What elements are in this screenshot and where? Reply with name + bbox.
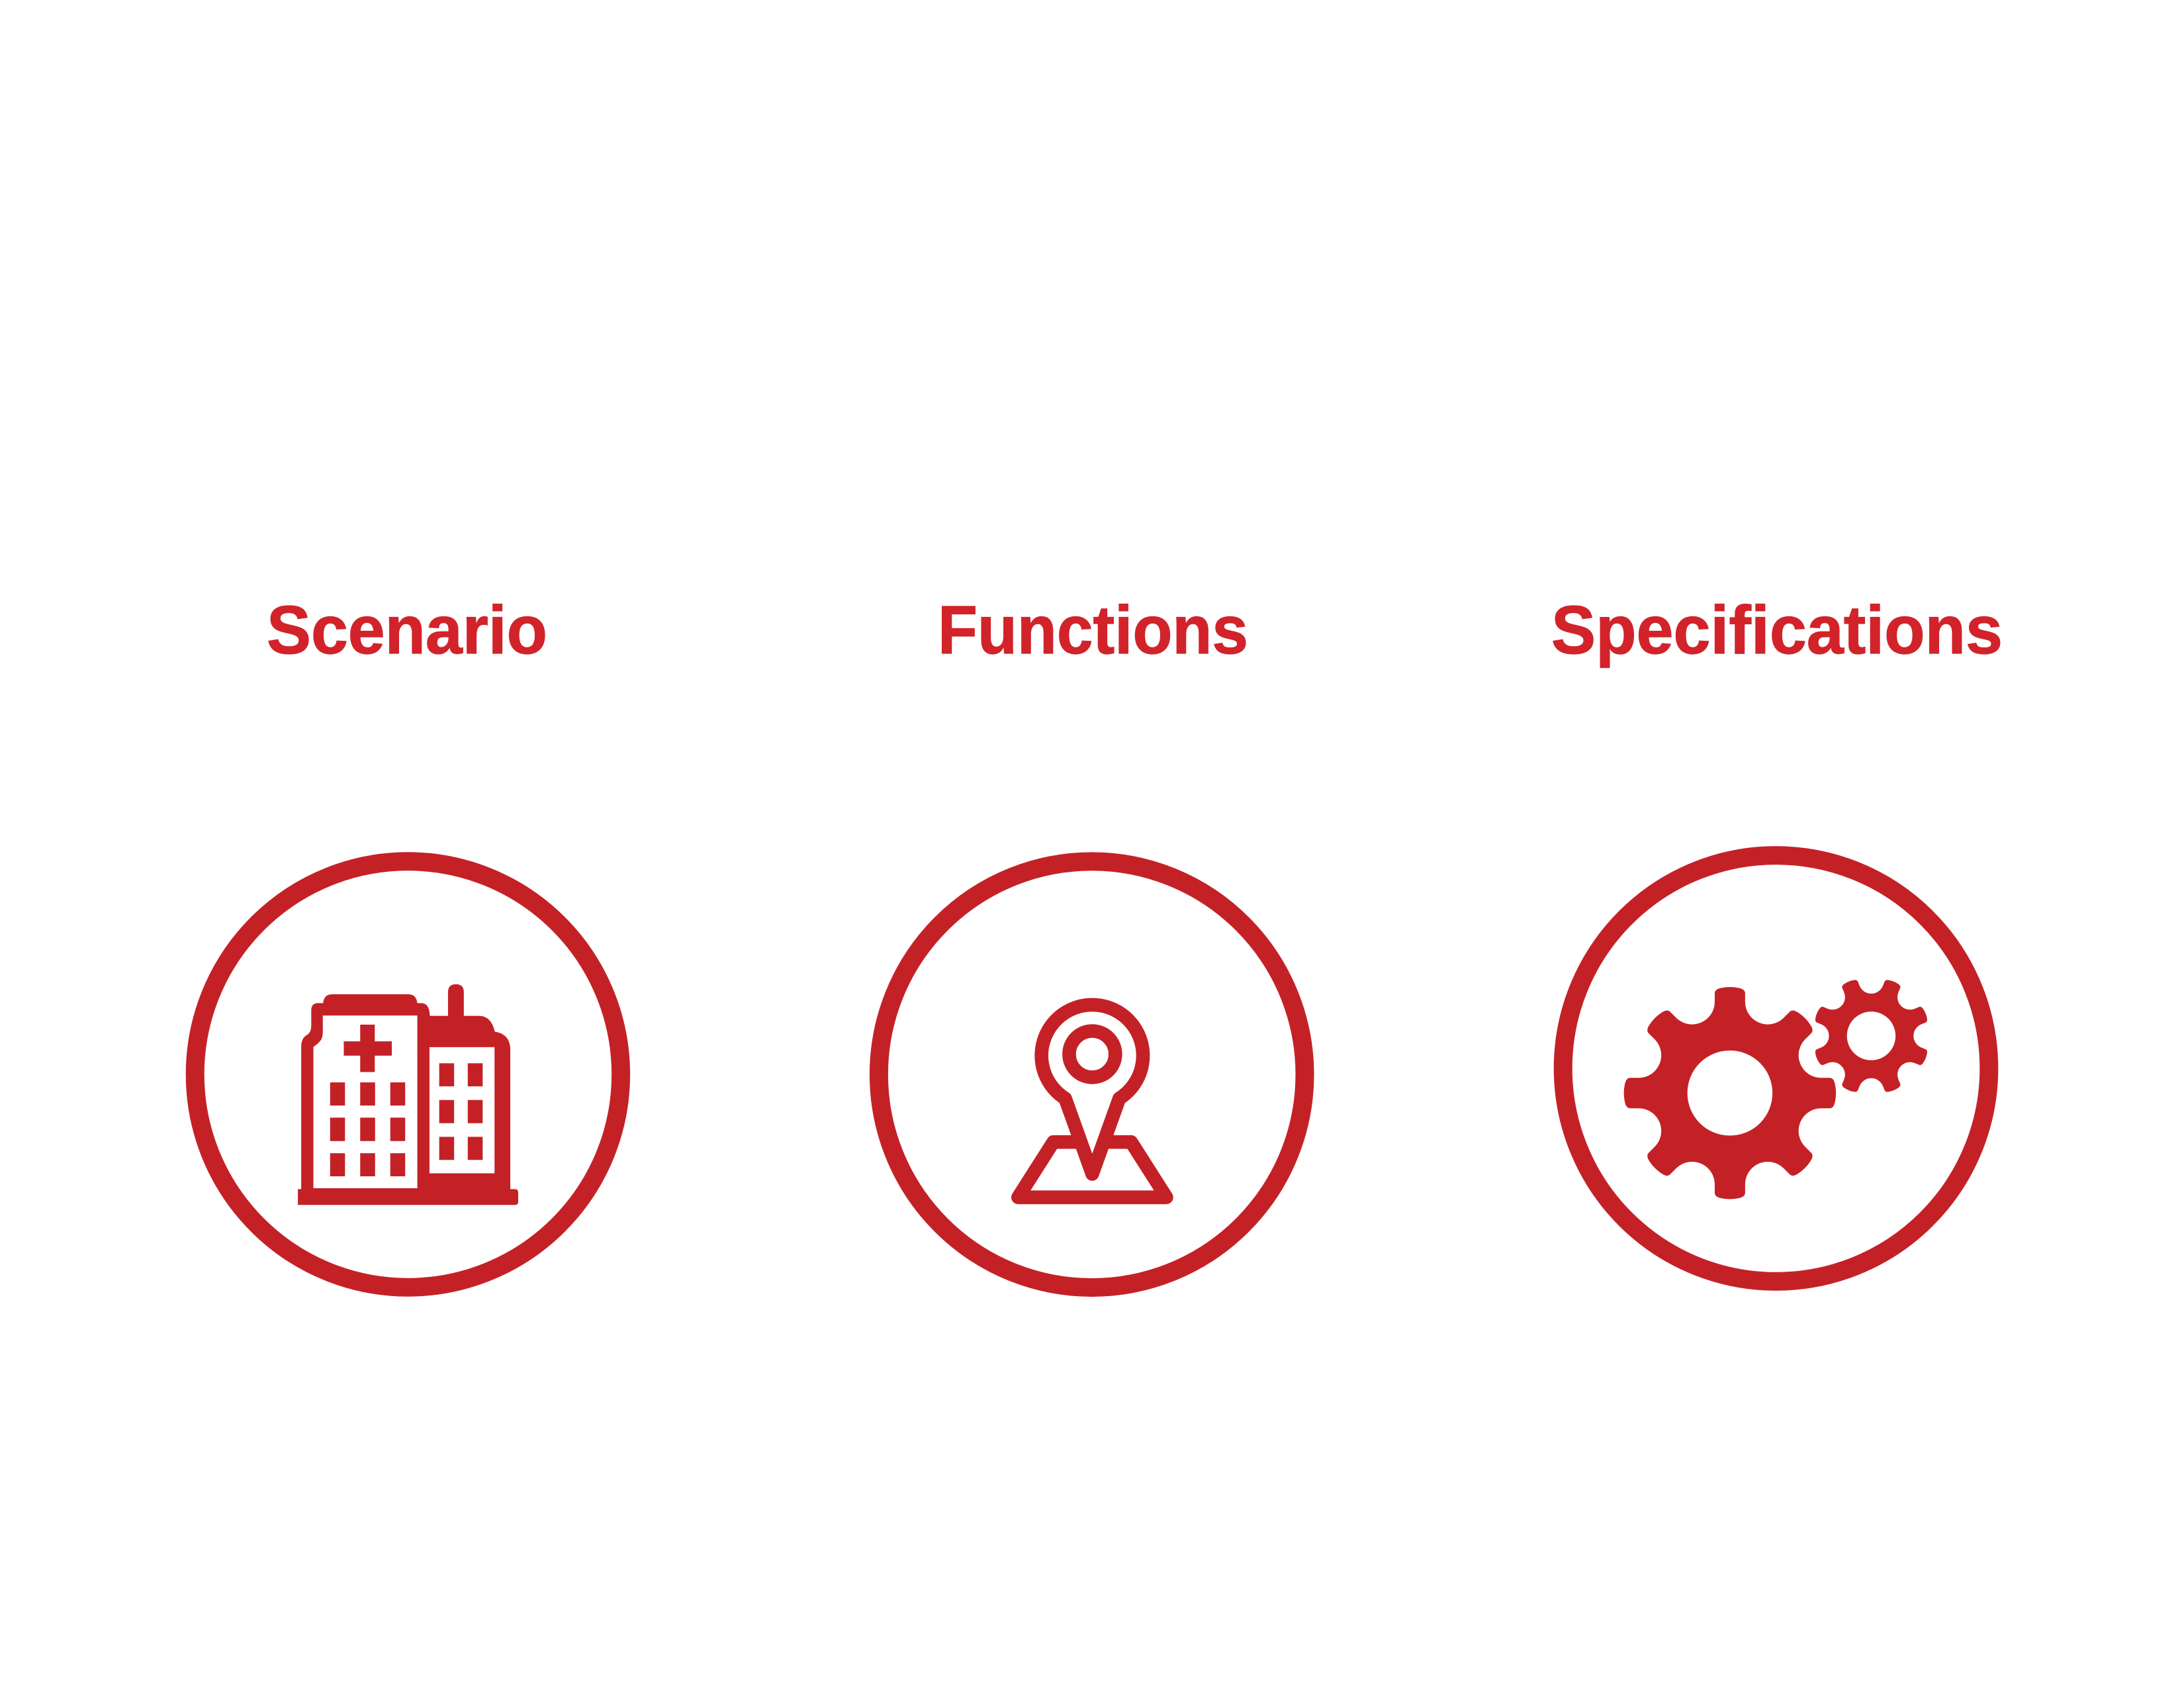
circle outline: functions (879, 861, 1304, 1288)
panel: functions (879, 592, 1304, 1288)
panel: specifications (1551, 592, 2003, 1282)
panel: scenario (195, 592, 621, 1288)
icon: hospital buildings (298, 984, 518, 1205)
circle outline: scenario (195, 861, 621, 1288)
icon: gears (1624, 959, 1948, 1199)
icon: map location pin (1018, 1005, 1166, 1197)
heading: Functions: Functions (938, 592, 1248, 668)
circle outline: specifications (1563, 855, 1989, 1282)
heading: Scenario: Scenario (267, 592, 547, 668)
large gear (1624, 987, 1836, 1199)
small gear (1794, 959, 1948, 1113)
heading: Specifications: Specifications (1551, 592, 2003, 668)
